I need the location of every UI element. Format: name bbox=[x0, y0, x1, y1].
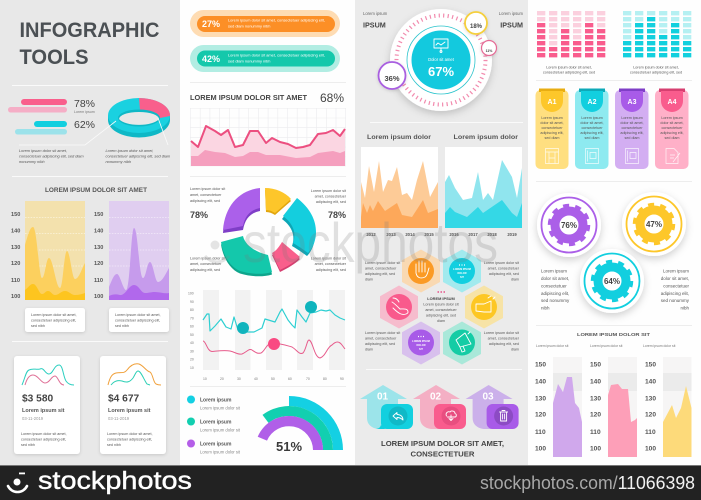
ring caption left: Lorem ipsum dolor sit amet, bbox=[19, 148, 67, 153]
center text: amet, consectetuer bbox=[425, 308, 457, 312]
card A2 bbox=[575, 88, 608, 169]
pill orange bbox=[190, 10, 340, 37]
center text: diam bbox=[437, 319, 445, 323]
arrows caption bbox=[381, 439, 504, 458]
gear note left: nibh bbox=[541, 306, 550, 310]
stat card 1: consectetuer adipiscing elit, bbox=[21, 438, 66, 442]
note card right bbox=[109, 308, 169, 332]
chart: purple: 110 bbox=[94, 278, 103, 284]
card A1: A1 bbox=[548, 99, 557, 106]
heading: LOREM IPSUM DOLOR SIT AMET bbox=[190, 95, 308, 102]
card A4 bbox=[655, 88, 688, 169]
donut note bottom right: amet, consectetuer bbox=[315, 262, 347, 266]
side note top left: adipiscing elit, sed bbox=[365, 272, 395, 276]
gear 47%: 47% bbox=[646, 220, 662, 229]
donut note top right: 78% bbox=[328, 210, 346, 220]
panel: hexagons bbox=[365, 250, 520, 364]
gauge value bbox=[428, 57, 455, 79]
gear 64%: 64% bbox=[604, 277, 620, 286]
card A3: A3 bbox=[628, 99, 637, 106]
gear note right: dolor sit amet, bbox=[661, 276, 689, 281]
gear note left: sed nonummy bbox=[541, 298, 570, 303]
card A1 bbox=[536, 88, 568, 169]
panel: block bar charts bbox=[537, 11, 691, 74]
gear 64% bbox=[580, 249, 644, 313]
hex purple text bbox=[402, 322, 440, 364]
side note bottom right: diam bbox=[511, 348, 519, 352]
card A2: adipiscing elit, bbox=[580, 131, 604, 135]
heading left: Lorem ipsum dolor bbox=[367, 134, 432, 141]
chart: purple column: 120 bbox=[535, 412, 546, 418]
side note bottom left: diam bbox=[365, 348, 373, 352]
chart: pink column: 120 bbox=[590, 412, 601, 418]
title: INFOGRAPHIC bbox=[20, 19, 160, 42]
pill teal: Lorem ipsum dolor sit amet, consectetuer adipiscing elit, bbox=[228, 52, 325, 58]
axis labels: 50 bbox=[190, 333, 194, 337]
stat card 2: Lorem ipsum sit bbox=[108, 408, 151, 414]
legend: Lorem ipsum bbox=[200, 442, 232, 448]
hex cyan text bbox=[443, 250, 481, 292]
panel: fan chart legend bbox=[187, 396, 343, 454]
card A2: Lorem ipsum bbox=[581, 116, 603, 120]
panel: year area charts bbox=[361, 134, 522, 237]
axis labels: 50 bbox=[271, 377, 275, 381]
chart: cyan blocks: consectetuer adipiscing elit, sed bbox=[630, 70, 682, 74]
chart: pink column: 130 bbox=[590, 396, 601, 402]
note card left: sed nibh bbox=[31, 324, 45, 328]
chart: yellow column: 150 bbox=[645, 362, 656, 368]
card A1: adipiscing elit, bbox=[540, 131, 564, 135]
center text bbox=[423, 292, 459, 323]
chart: purple: 100 bbox=[94, 294, 103, 300]
donut note top left: Lorem ipsum dolor sit bbox=[190, 187, 225, 191]
stat card 2: consectetuer adipiscing elit, bbox=[107, 438, 152, 442]
chart: purple column: 150 bbox=[535, 362, 546, 368]
card A3 bbox=[615, 88, 648, 169]
chart: pink column: 140 bbox=[590, 378, 601, 386]
side note top right bbox=[484, 261, 520, 282]
arrow 02 bbox=[413, 385, 466, 429]
chart: yellow: 150 bbox=[11, 212, 20, 218]
heading right: Lorem ipsum dolor bbox=[454, 134, 519, 141]
title bbox=[20, 19, 160, 69]
gauge value: 67% bbox=[428, 64, 454, 79]
ring caption left: nonummy nibh bbox=[19, 159, 45, 164]
side note top left: Lorem ipsum dolor sit bbox=[365, 261, 400, 265]
legend bbox=[187, 396, 241, 454]
chart: cyan: 2019 bbox=[507, 232, 517, 237]
chart: yellow: 140 bbox=[11, 228, 20, 234]
donut note bottom left: amet, consectetuer bbox=[190, 262, 222, 266]
arrow 03: 03 bbox=[482, 392, 494, 402]
side note bottom left bbox=[365, 331, 400, 352]
arrow 02: 02 bbox=[430, 392, 441, 402]
axis labels: 30 bbox=[237, 377, 241, 381]
bubble 36%: 36% bbox=[384, 74, 400, 83]
ring caption right: Lorem ipsum dolor sit amet, bbox=[106, 148, 154, 153]
chart: pink column bbox=[590, 344, 637, 457]
card A2: dolor sit amet, bbox=[580, 121, 604, 125]
card A4: adipiscing elit, bbox=[660, 131, 684, 135]
hex purple text: SIT bbox=[419, 348, 423, 351]
donut note bottom left: adipiscing elit, sed bbox=[190, 268, 220, 272]
chart: yellow column: 140 bbox=[645, 378, 656, 386]
side note top left: amet, consectetuer bbox=[365, 266, 397, 270]
progress bars bbox=[8, 98, 95, 134]
stat card 1 bbox=[14, 356, 80, 454]
side note top left: diam bbox=[365, 278, 373, 282]
chart: yellow column: Lorem ipsum dolor sit bbox=[643, 344, 675, 348]
card A3: adipiscing elit, bbox=[620, 131, 644, 135]
card A2: consectetuer bbox=[581, 126, 603, 130]
gear 47% bbox=[622, 192, 686, 256]
legend: Lorem ipsum dolor sit bbox=[200, 406, 241, 410]
label right bbox=[499, 11, 524, 30]
hex cyan text: LOREM IPSUM bbox=[453, 268, 471, 271]
chart: yellow bbox=[11, 201, 85, 300]
axis labels bbox=[188, 292, 344, 381]
ring caption right bbox=[106, 148, 171, 164]
gear note left bbox=[541, 268, 570, 310]
chart: cyan blocks bbox=[623, 11, 691, 74]
panel: arrows bbox=[360, 385, 519, 458]
gear note right: consectetuer bbox=[663, 284, 690, 288]
ring caption right: consectetuer adipiscing elit, sed diam bbox=[106, 154, 171, 158]
chart: pink column: 150 bbox=[590, 362, 601, 368]
gear 76% bbox=[537, 193, 601, 257]
stat card 1: 03-11-2019 bbox=[22, 416, 44, 421]
chart: purple column: 130 bbox=[535, 396, 546, 402]
side note top right: adipiscing elit, sed bbox=[489, 272, 519, 276]
note card right: Lorem ipsum dolor sit amet, bbox=[115, 313, 160, 317]
donut note top right bbox=[311, 189, 347, 220]
panel: grid line chart bbox=[190, 91, 346, 166]
label right: Lorem ipsum bbox=[499, 11, 524, 16]
pill teal bbox=[190, 45, 340, 72]
side note bottom right: adipiscing elit, sed bbox=[489, 342, 519, 346]
panel: gears bbox=[537, 192, 690, 313]
card A3: Lorem ipsum bbox=[621, 116, 643, 120]
chart: purple column: 100 bbox=[535, 446, 546, 452]
chart bbox=[190, 108, 346, 166]
card A1: sed diam bbox=[545, 136, 559, 140]
donut note bottom right bbox=[311, 256, 347, 272]
legend: Lorem ipsum dolor sit bbox=[200, 428, 241, 432]
side note bottom right: amet, consectetuer bbox=[488, 336, 520, 340]
arrow 03 bbox=[466, 385, 519, 429]
arrow 01: 01 bbox=[377, 392, 388, 402]
stat card 1: $3 580 bbox=[22, 394, 53, 404]
side note top right: amet, consectetuer bbox=[488, 266, 520, 270]
donut note top left: amet, consectetuer bbox=[190, 193, 222, 197]
axis labels: 10 bbox=[203, 377, 207, 381]
progress bars: 78% bbox=[74, 98, 95, 110]
panel: gauge bbox=[363, 9, 524, 111]
label left: Lorem ipsum bbox=[363, 11, 388, 16]
heading: LOREM IPSUM DOLOR SIT bbox=[577, 332, 650, 338]
pill teal: 42% bbox=[202, 54, 220, 64]
side note top right: diam bbox=[511, 278, 519, 282]
progress bars: 62% bbox=[74, 119, 95, 131]
card A4: dolor sit amet, bbox=[660, 121, 684, 125]
chart: yellow column: 120 bbox=[645, 412, 656, 418]
chart: purple: 130 bbox=[94, 245, 103, 251]
side note top right: Lorem ipsum dolor sit bbox=[484, 261, 519, 265]
icon: presentation board bbox=[434, 39, 448, 52]
watermark: stockphotos bbox=[243, 211, 498, 274]
side note bottom left: adipiscing elit, sed bbox=[365, 342, 395, 346]
gauge dial bbox=[390, 9, 492, 111]
chart: yellow column: 130 bbox=[645, 396, 656, 402]
chart: cyan bbox=[445, 147, 522, 237]
gear note left: Lorem ipsum bbox=[541, 268, 567, 274]
panel: pill callouts bbox=[190, 10, 340, 72]
axis labels: 90 bbox=[340, 377, 344, 381]
hex cyan text: DOLOR bbox=[457, 272, 467, 275]
chart: pink column: Lorem ipsum dolor sit bbox=[590, 344, 622, 348]
pill orange: Lorem ipsum dolor sit amet, consectetuer adipiscing elit, bbox=[228, 18, 325, 22]
card A1: Lorem ipsum bbox=[541, 116, 563, 120]
arrow 01 bbox=[360, 385, 413, 429]
radial fan chart bbox=[258, 396, 343, 454]
hex purple text: LOREM IPSUM bbox=[412, 340, 430, 343]
chart: pink blocks bbox=[537, 11, 605, 74]
card A3: dolor sit amet, bbox=[620, 121, 644, 125]
donut note bottom left bbox=[190, 256, 225, 272]
center text: Lorem ipsum dolor sit bbox=[423, 302, 459, 306]
side note bottom left: amet, consectetuer bbox=[365, 336, 397, 340]
arrows caption: CONSECTETUER bbox=[410, 450, 475, 458]
legend: Lorem ipsum bbox=[200, 420, 232, 426]
ring caption left bbox=[19, 148, 84, 164]
stat card 2: Lorem ipsum dolor sit amet, bbox=[107, 432, 152, 436]
chart: yellow column bbox=[643, 344, 692, 457]
pink series bbox=[203, 338, 345, 358]
hex cyan text: SIT bbox=[460, 276, 464, 279]
chart: yellow: 120 bbox=[11, 261, 20, 267]
side note bottom right: Lorem ipsum dolor sit bbox=[484, 331, 519, 335]
gear note left: dolor sit amet, bbox=[541, 276, 569, 281]
card A4: A4 bbox=[668, 99, 677, 106]
legend: Lorem ipsum dolor sit bbox=[200, 450, 241, 454]
axis labels: 70 bbox=[306, 377, 310, 381]
hex purple text: DOLOR bbox=[416, 344, 426, 347]
card A3: consectetuer bbox=[621, 126, 643, 130]
donut note bottom right: Lorem ipsum dolor sit bbox=[311, 256, 346, 260]
footer url: stockphotos.com/11066398 bbox=[480, 472, 695, 493]
chart: pink blocks: Lorem ipsum dolor sit amet, bbox=[546, 66, 592, 70]
stat card 2: sed nibh bbox=[107, 443, 121, 447]
chart: pink blocks: consectetuer adipiscing elit, sed bbox=[543, 70, 595, 74]
card A1: dolor sit amet, bbox=[540, 121, 564, 125]
chart: cyan: 2016 bbox=[449, 232, 459, 237]
note card left bbox=[25, 308, 85, 332]
chart: orange: 2014 bbox=[405, 232, 415, 237]
donut note top left: adipiscing elit, sed bbox=[190, 199, 220, 203]
chart: yellow: 130 bbox=[11, 245, 20, 251]
pill orange: 27% bbox=[202, 19, 220, 29]
pill orange: sed diam nonummy nibh bbox=[228, 24, 270, 28]
chart: purple bbox=[94, 201, 169, 300]
axis labels: 100 bbox=[188, 292, 194, 296]
axis labels: 80 bbox=[323, 377, 327, 381]
pill teal: sed diam nonummy nibh bbox=[228, 58, 270, 64]
gear note left: consectetuer bbox=[541, 284, 567, 288]
chart: purple column: Lorem ipsum dolor sit bbox=[536, 344, 568, 348]
side note bottom right bbox=[484, 331, 520, 352]
legend: Lorem ipsum bbox=[200, 398, 232, 404]
chart: yellow column: 100 bbox=[645, 446, 656, 452]
card A2: A2 bbox=[588, 99, 597, 106]
gear note right: sed nonummy bbox=[661, 298, 690, 303]
bubble 18%: 18% bbox=[470, 24, 483, 30]
chart: yellow: 110 bbox=[11, 278, 20, 284]
card A4: consectetuer bbox=[661, 126, 683, 130]
ring caption left: consectetuer adipiscing elit, sed diam bbox=[19, 154, 84, 158]
card A4: Lorem ipsum bbox=[661, 116, 683, 120]
3D ring chart bbox=[19, 98, 170, 145]
note card right: sed nibh bbox=[115, 324, 129, 328]
stat card 2: 03-11-2019 bbox=[108, 416, 130, 421]
center text: LOREM IPSUM bbox=[427, 296, 455, 301]
center text: adipiscing elit, sed bbox=[426, 314, 456, 318]
axis labels: 70 bbox=[190, 316, 194, 320]
donut note top right: adipiscing elit, sed bbox=[316, 200, 346, 204]
chart: yellow: 100 bbox=[11, 294, 20, 300]
card A3: sed diam bbox=[625, 136, 639, 140]
chart: cyan: 2018 bbox=[487, 232, 497, 237]
hex yellow hand bbox=[465, 286, 503, 328]
axis labels: 90 bbox=[190, 300, 194, 304]
axis labels: 10 bbox=[190, 366, 194, 370]
radial fan chart: 51% bbox=[276, 439, 302, 454]
chart: pink column: 110 bbox=[590, 429, 601, 436]
panel: small area charts bbox=[535, 332, 692, 457]
chart: purple column: 140 bbox=[535, 378, 546, 386]
bubble 11%: 11% bbox=[486, 49, 493, 53]
chart: orange: 2015 bbox=[424, 232, 434, 237]
note card left: Lorem ipsum dolor sit amet, bbox=[31, 313, 76, 317]
progress bars: Lorem ipsum bbox=[74, 110, 95, 114]
bubble 18% bbox=[465, 12, 487, 34]
panel: stat cards bbox=[14, 356, 166, 454]
axis labels: 40 bbox=[254, 377, 258, 381]
panel: title and torus bbox=[8, 19, 171, 164]
chart: purple column bbox=[535, 344, 582, 457]
gear note right: adipiscing elit, bbox=[661, 291, 689, 296]
donut note top left: 78% bbox=[190, 210, 208, 220]
axis labels: 30 bbox=[190, 350, 194, 354]
side note bottom left: Lorem ipsum dolor sit bbox=[365, 331, 400, 335]
card A2: sed diam bbox=[585, 136, 599, 140]
panel: 3D donut bbox=[190, 187, 347, 276]
chart: purple: 140 bbox=[94, 228, 103, 234]
bubble 11% bbox=[482, 40, 496, 56]
chart: purple: 150 bbox=[94, 212, 103, 218]
panel: label cards bbox=[536, 88, 688, 169]
label right: IPSUM bbox=[500, 20, 523, 30]
bubble 36% bbox=[378, 62, 406, 89]
arrows caption: LOREM IPSUM DOLOR SIT AMET, bbox=[381, 439, 504, 448]
chart: pink column: 100 bbox=[590, 446, 601, 452]
chart: cyan: 2017 bbox=[468, 232, 478, 237]
note card right: consectetuer adipiscing elit, bbox=[115, 318, 160, 322]
panel: area charts yellow purple bbox=[11, 188, 169, 332]
logo: stockphotos bbox=[38, 467, 192, 495]
donut chart bbox=[221, 188, 316, 276]
stat card 1: Lorem ipsum dolor sit amet, bbox=[21, 432, 66, 436]
chart: purple column: 110 bbox=[535, 429, 546, 436]
heading: LOREM IPSUM DOLOR SIT AMET bbox=[45, 188, 147, 194]
value 68%: 68% bbox=[320, 91, 344, 105]
card A1: consectetuer bbox=[541, 126, 563, 130]
title: TOOLS bbox=[20, 46, 88, 69]
gear 76%: 76% bbox=[561, 221, 577, 230]
stat card 1: Lorem ipsum sit bbox=[22, 408, 65, 414]
chart: cyan blocks: Lorem ipsum dolor sit amet, bbox=[633, 66, 679, 70]
axis labels: 40 bbox=[190, 341, 194, 345]
donut note top left bbox=[190, 187, 225, 220]
note card left: consectetuer adipiscing elit, bbox=[31, 318, 76, 322]
card A4: sed diam bbox=[665, 136, 679, 140]
label left: IPSUM bbox=[363, 20, 386, 30]
axis labels: 20 bbox=[190, 358, 194, 362]
stat card 2: $4 677 bbox=[108, 394, 139, 404]
hex pink gesture bbox=[380, 286, 418, 328]
axis labels: 60 bbox=[288, 377, 292, 381]
chart: orange: 2012 bbox=[366, 232, 376, 237]
panel: dual line chart bbox=[188, 290, 345, 381]
chart: orange: 2013 bbox=[386, 232, 396, 237]
axis labels: 80 bbox=[190, 308, 194, 312]
footer bar bbox=[0, 465, 701, 500]
hex green megaphone bbox=[443, 322, 481, 364]
gauge value: Dolor sit amet bbox=[428, 57, 455, 62]
gear note right: nibh bbox=[680, 306, 689, 310]
gear note left: adipiscing elit, bbox=[541, 291, 569, 296]
gear note right bbox=[661, 268, 690, 310]
chart: yellow column: 110 bbox=[645, 429, 656, 436]
stat card 1: sed nibh bbox=[21, 443, 35, 447]
stat card 2 bbox=[100, 356, 166, 454]
donut note top right: Lorem ipsum dolor sit bbox=[311, 189, 346, 193]
donut note bottom left: Lorem ipsum dolor sit bbox=[190, 256, 225, 260]
ring caption right: nonummy nibh bbox=[106, 159, 131, 164]
donut note bottom right: adipiscing elit, sed bbox=[316, 268, 346, 272]
chart: orange bbox=[361, 147, 438, 237]
donut note top right: amet, consectetuer bbox=[315, 194, 347, 198]
side note top left bbox=[365, 261, 400, 282]
gear note right: Lorem ipsum bbox=[663, 268, 689, 274]
label left bbox=[363, 11, 388, 30]
teal series bbox=[203, 301, 345, 334]
axis labels: 60 bbox=[190, 324, 194, 328]
hex orange hand bbox=[402, 250, 440, 292]
chart: purple: 120 bbox=[94, 261, 103, 267]
axis labels: 20 bbox=[220, 377, 224, 381]
